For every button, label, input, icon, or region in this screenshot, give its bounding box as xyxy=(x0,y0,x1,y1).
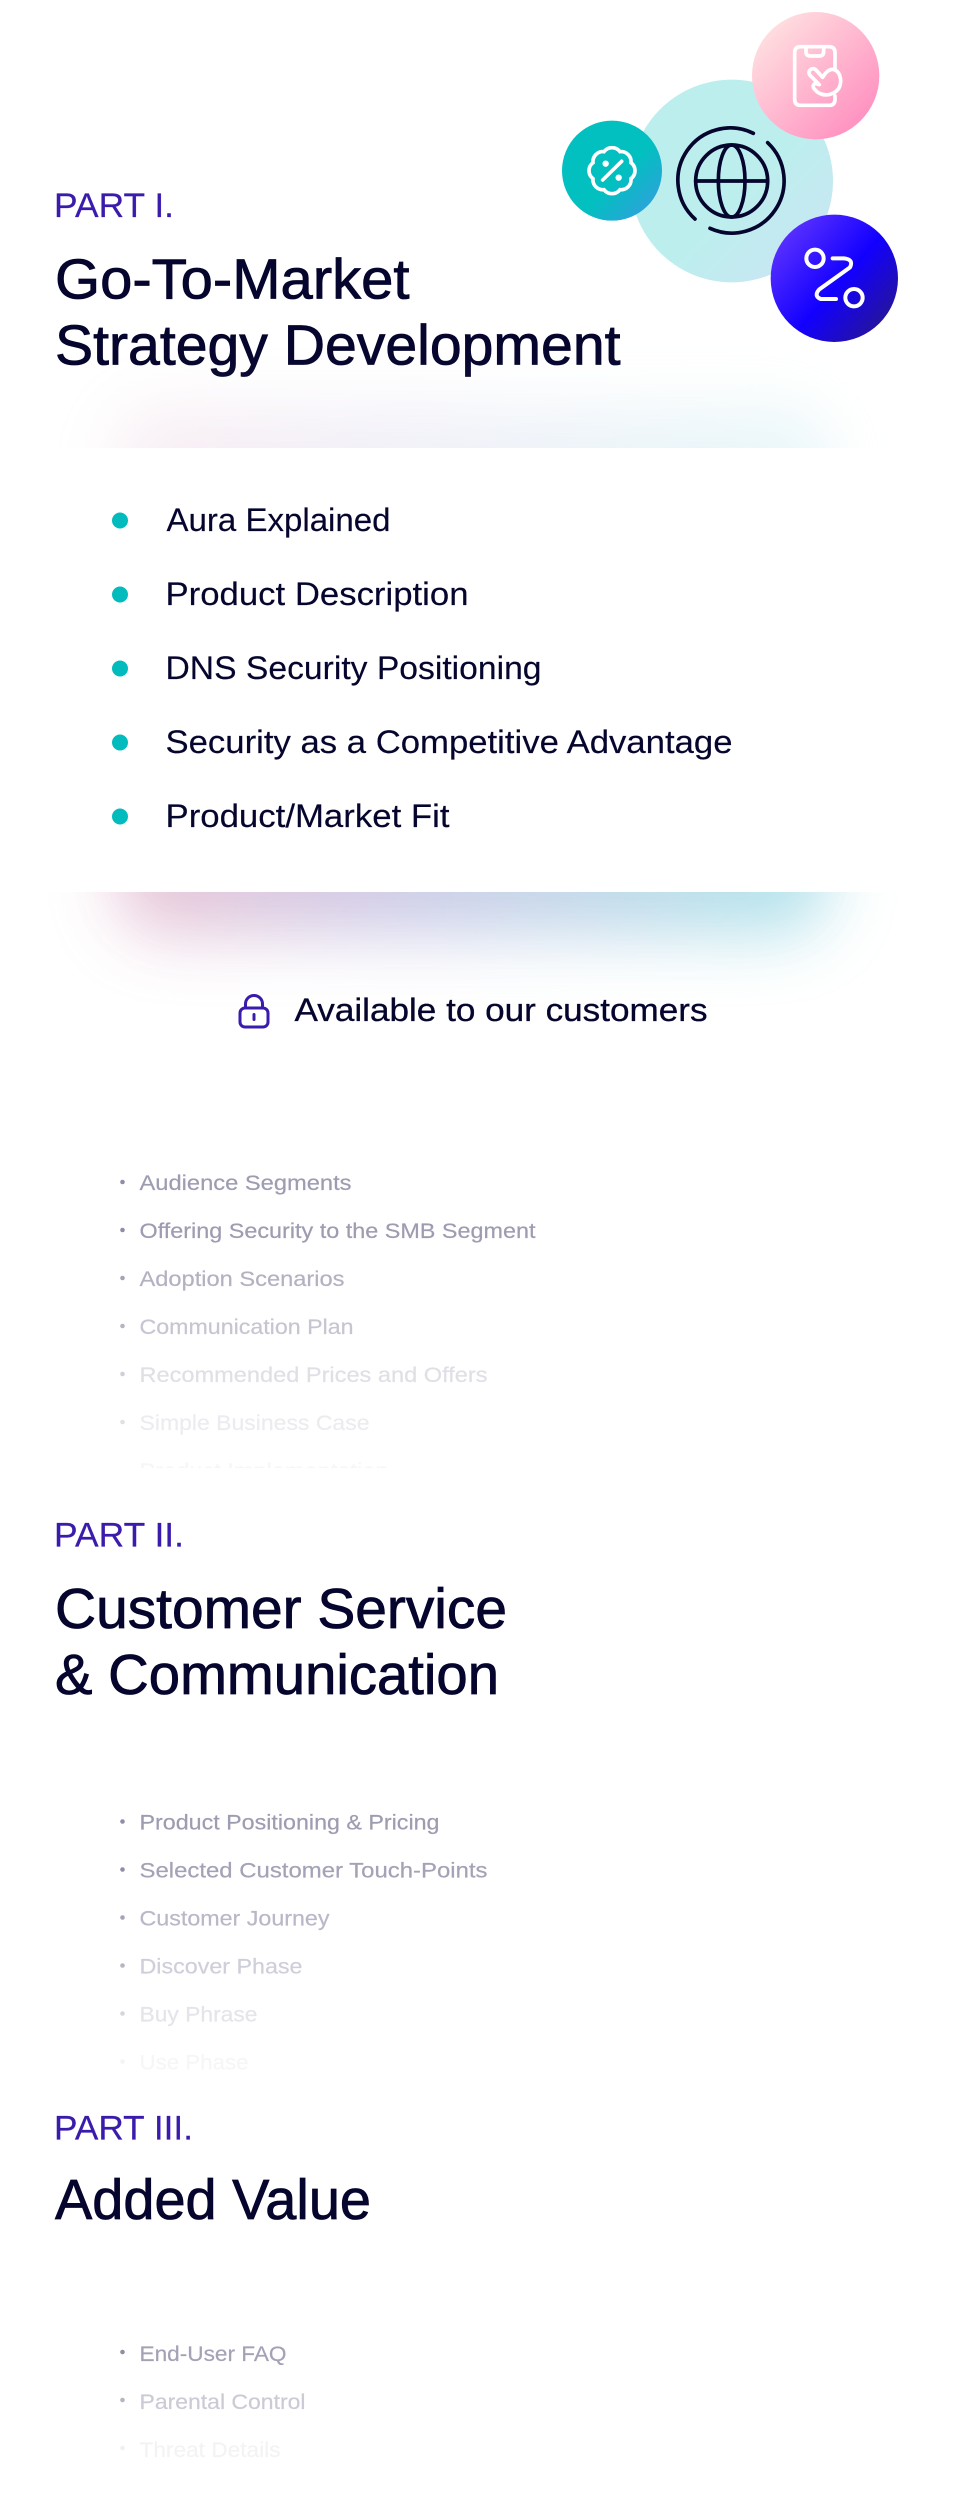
part II heading xyxy=(55,1577,507,1707)
availability text: Available to our customers xyxy=(294,992,708,1028)
list: part III fading topics: Threat Details xyxy=(140,2438,280,2462)
part III heading: Added Value xyxy=(55,2168,371,2232)
list: part I fading topics: Product Implementation xyxy=(140,1459,388,1483)
bullet list: Product Description xyxy=(166,576,468,612)
part I heading: Strategy Development xyxy=(55,314,621,378)
list: part I fading topics: Recommended Prices and Offers xyxy=(140,1363,488,1387)
part I heading: Go-To-Market xyxy=(55,248,410,312)
list: part I fading topics: Adoption Scenarios xyxy=(140,1267,344,1291)
list: part II fading topics: Use Phase xyxy=(140,2050,248,2074)
part II heading: Customer Service xyxy=(55,1577,507,1641)
part II label: PART II. xyxy=(54,1516,184,1554)
glow above panel xyxy=(115,408,830,538)
availability note with lock icon xyxy=(240,992,708,1028)
icon: lock xyxy=(240,996,268,1027)
list: part I fading topics: Offering Security to the SMB Segment xyxy=(140,1219,536,1243)
list: part II fading topics: Selected Customer Touch-Points xyxy=(140,1858,488,1882)
bullet list: Product/Market Fit xyxy=(166,798,450,834)
part I label: PART I. xyxy=(54,187,174,225)
bullet list: DNS Security Positioning xyxy=(166,650,542,686)
pink circle with phone tap icon xyxy=(752,12,879,139)
illustration: globe and feature bubbles xyxy=(562,12,898,342)
panel: chapter contents xyxy=(0,408,954,936)
bullet list xyxy=(112,502,732,834)
list: part III fading topics: Parental Control xyxy=(140,2390,306,2414)
part I heading xyxy=(55,248,621,378)
list: part II fading topics: Product Positioning & Pricing xyxy=(140,1810,440,1834)
list: part II fading topics xyxy=(120,1810,487,2074)
white panel card xyxy=(0,448,954,892)
teal circle with discount badge icon xyxy=(562,121,662,221)
list: part I fading topics: Communication Plan xyxy=(140,1315,354,1339)
large circle with globe icon xyxy=(630,80,833,282)
list: part I fading topics: Audience Segments xyxy=(140,1171,352,1195)
list: part III fading topics xyxy=(120,2342,306,2462)
part II heading: & Communication xyxy=(55,1643,499,1707)
list: part II fading topics: Buy Phrase xyxy=(140,2002,258,2026)
list: part II fading topics: Customer Journey xyxy=(140,1906,330,1930)
list: part III fading topics: End-User FAQ xyxy=(140,2342,286,2366)
list: part I fading topics: Simple Business Case xyxy=(140,1411,370,1435)
bullet list: Aura Explained xyxy=(166,502,390,538)
list: part II fading topics: Discover Phase xyxy=(140,1954,302,1978)
bullet list: Security as a Competitive Advantage xyxy=(166,724,732,760)
list: part I fading topics xyxy=(120,1171,536,1483)
part III label: PART III. xyxy=(54,2110,193,2148)
blue circle with route icon xyxy=(771,215,898,342)
glow below panel xyxy=(115,790,830,936)
